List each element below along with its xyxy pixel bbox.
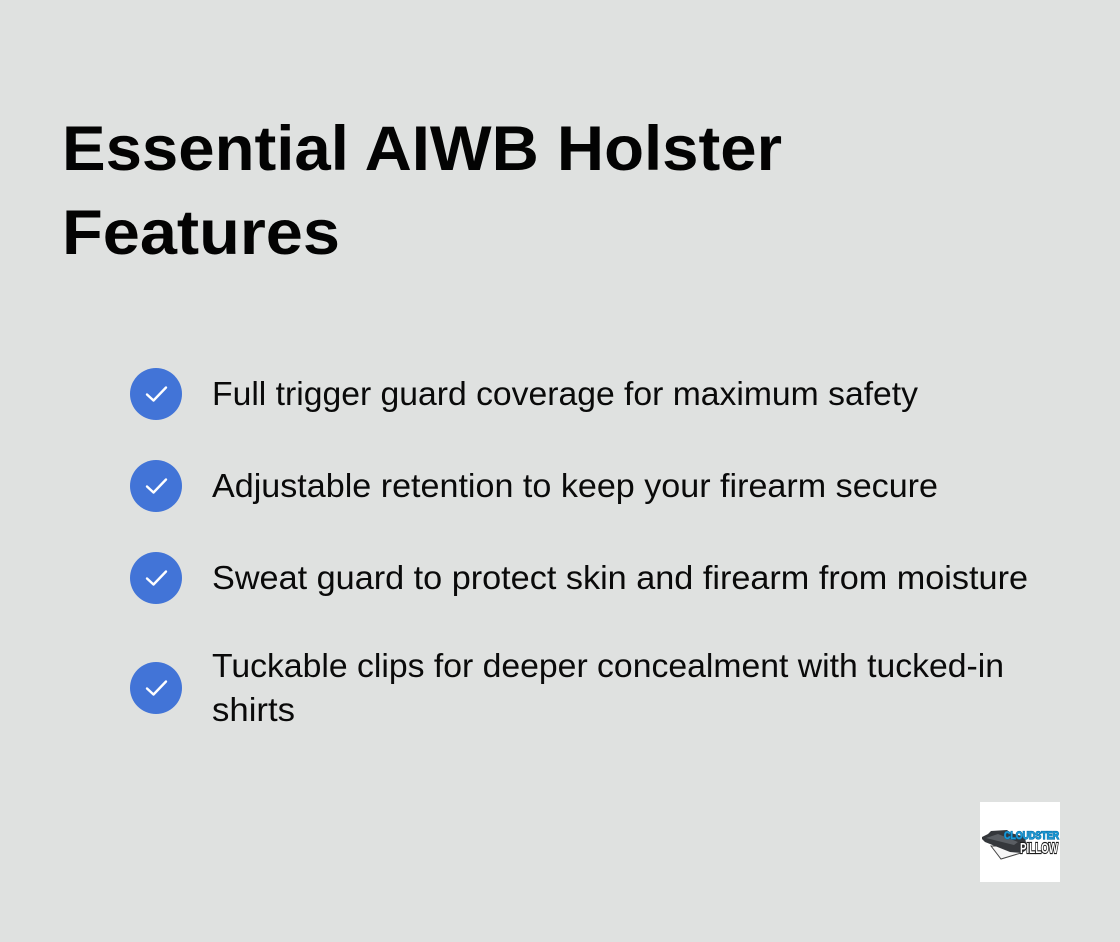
item 4: tuckable clips: Tuckable clips for deeper concealment with tucked-in — [212, 647, 1004, 684]
logo: Cloudster Pillow — [980, 802, 1060, 882]
item 4: tuckable clips: shirts — [212, 691, 295, 728]
item 1: trigger guard coverage: Full trigger guard coverage for maximum safety — [212, 375, 919, 412]
title: Essential AIWB Holster — [62, 114, 782, 184]
checklist — [130, 368, 1028, 728]
item 4: tuckable clips — [130, 647, 1004, 728]
logo: Cloudster Pillow: CLOUDSTER — [1004, 830, 1059, 842]
item 1: trigger guard coverage — [130, 368, 919, 420]
title — [62, 114, 782, 268]
item 2: adjustable retention: Adjustable retention to keep your firearm secure — [212, 467, 938, 504]
logo: Cloudster Pillow: PILLOW — [1020, 840, 1059, 857]
item 3: sweat guard — [130, 552, 1028, 604]
title: Features — [62, 198, 340, 268]
item 2: adjustable retention — [130, 460, 938, 512]
item 3: sweat guard: Sweat guard to protect skin and firearm from moisture — [212, 559, 1028, 596]
